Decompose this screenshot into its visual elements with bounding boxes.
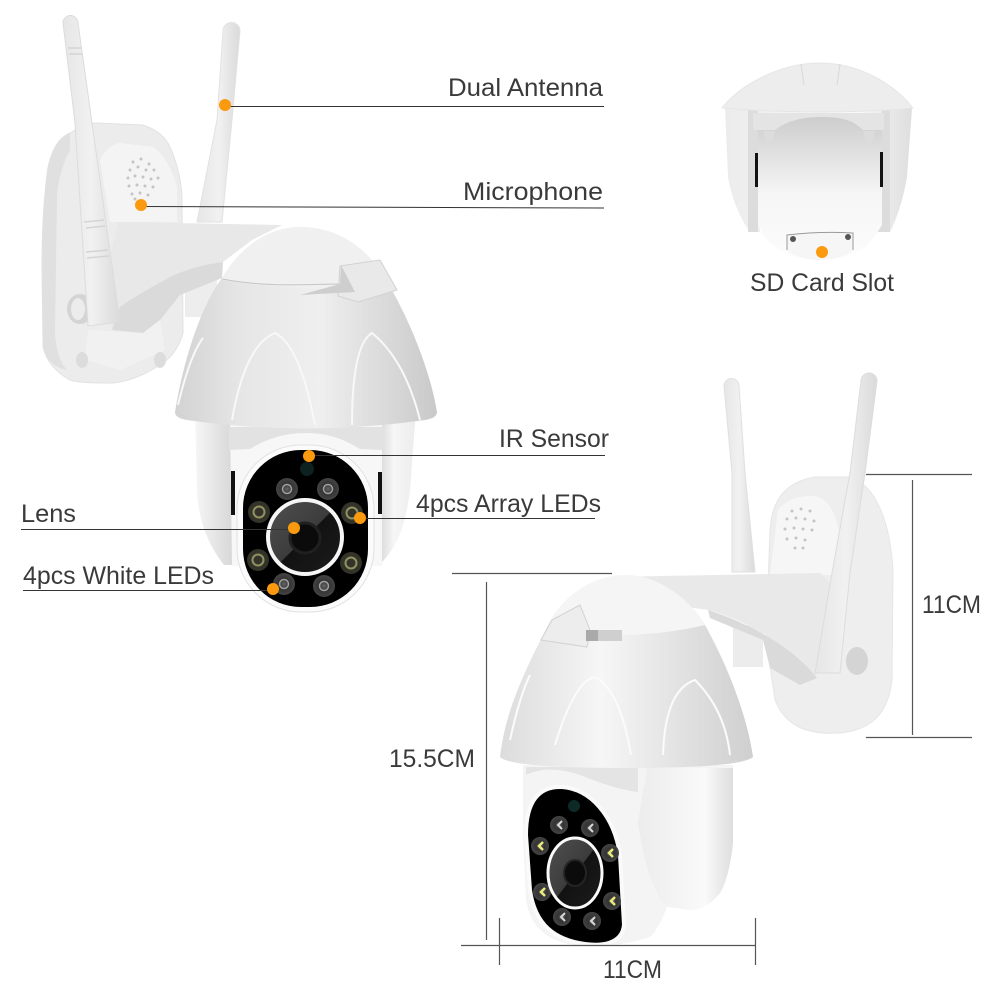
dimension lines <box>452 474 972 965</box>
lens <box>268 500 342 574</box>
labels: SD Card Slot <box>750 269 894 297</box>
speaker holes <box>784 508 816 550</box>
IR sensor <box>300 462 314 476</box>
labels: Dual Antenna <box>448 74 603 102</box>
callout lines <box>21 106 605 590</box>
lower housing <box>195 410 232 565</box>
callout markers <box>135 99 828 595</box>
labels: 15.5CM <box>389 745 475 773</box>
labels: 4pcs White LEDs <box>23 562 214 590</box>
swivel joint <box>846 647 868 675</box>
back antenna <box>724 379 755 572</box>
camera: dimensions view <box>500 373 893 946</box>
plate lower detail <box>85 320 165 370</box>
card cover <box>787 232 853 260</box>
labels: IR Sensor <box>499 425 609 453</box>
IR sensor <box>568 800 580 812</box>
wall plate <box>42 123 183 383</box>
labels: Microphone <box>463 178 603 206</box>
front antenna <box>815 373 877 673</box>
LEDs <box>531 816 621 930</box>
lens <box>548 838 602 908</box>
speaker holes <box>126 158 160 200</box>
dome <box>500 575 753 768</box>
lower housing <box>523 765 733 946</box>
labels: 11CM <box>922 591 981 619</box>
labels: 4pcs Array LEDs <box>416 490 601 518</box>
swivel joint <box>67 294 93 324</box>
camera face <box>237 445 374 612</box>
labels: Lens <box>21 500 76 528</box>
camera: SD card underside view <box>722 63 913 260</box>
camera: wall mount view <box>42 16 437 612</box>
column behind arm <box>185 265 217 317</box>
camera face <box>526 787 624 945</box>
mounting arm <box>100 222 282 330</box>
slot panel <box>758 115 882 260</box>
right antenna <box>197 22 240 222</box>
left antenna <box>63 16 120 326</box>
dome <box>175 227 437 428</box>
LEDs <box>273 478 339 597</box>
labels: 11CM <box>603 956 662 984</box>
dome <box>722 63 913 112</box>
wall plate <box>766 477 893 733</box>
mounting arm <box>610 573 836 678</box>
